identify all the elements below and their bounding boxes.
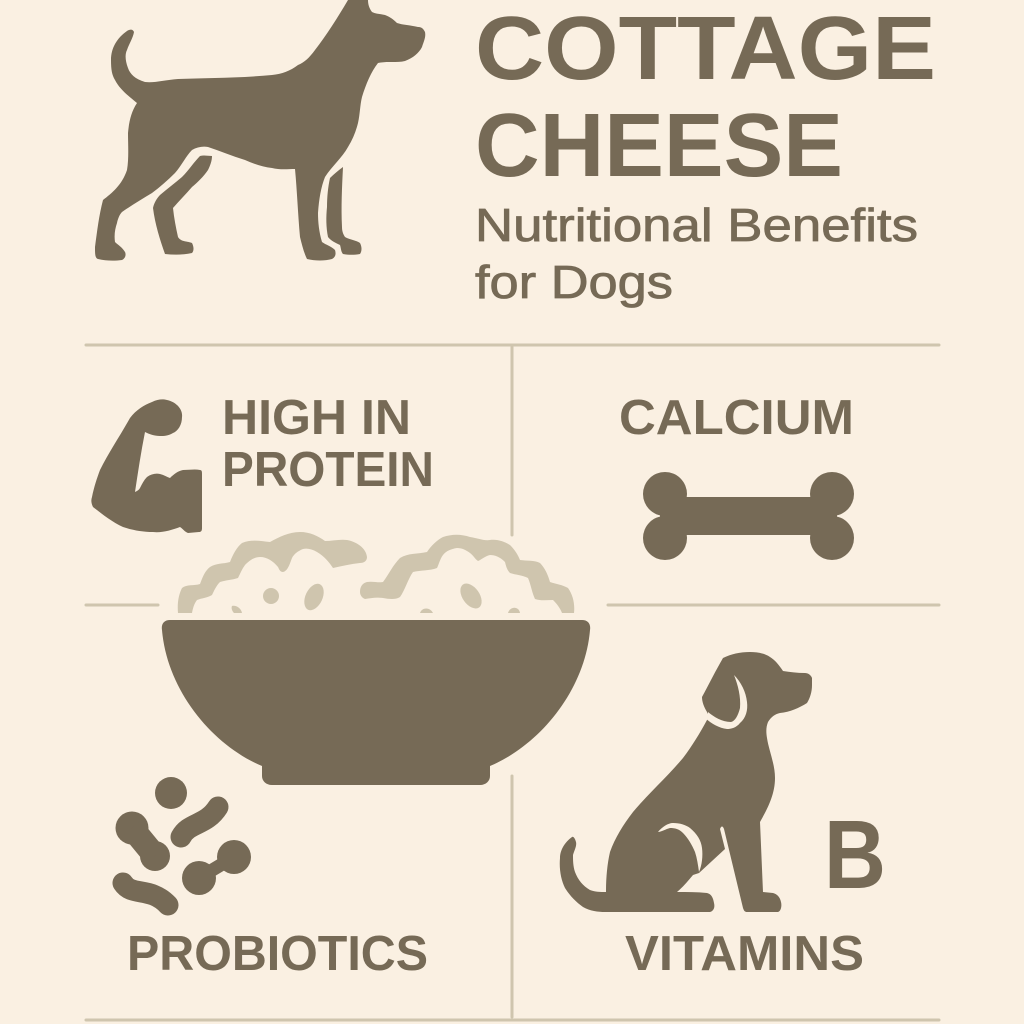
panel: probiotics	[116, 777, 428, 981]
bowl of cottage cheese	[162, 532, 590, 785]
cottage cheese curds	[178, 532, 574, 613]
panel: high in protein	[91, 391, 434, 533]
icon: probiotic bacteria	[116, 777, 251, 905]
label: probiotics: PROBIOTICS	[127, 927, 428, 981]
panel: B vitamins	[560, 652, 886, 981]
title	[475, 0, 936, 196]
bowl	[162, 620, 590, 785]
label: calcium: CALCIUM	[619, 391, 854, 445]
icon: sitting dog	[560, 652, 812, 912]
B letter: B	[824, 800, 886, 909]
label: high in protein: HIGH IN	[222, 391, 411, 445]
subtitle: for Dogs	[475, 256, 673, 308]
icon: standing dog	[95, 0, 425, 261]
icon: flexed arm	[91, 399, 202, 533]
title: COTTAGE	[475, 0, 936, 99]
label: high in protein	[222, 391, 434, 497]
label: vitamins: VITAMINS	[625, 927, 864, 981]
panel: calcium	[619, 391, 854, 560]
subtitle: Nutritional Benefits	[475, 199, 918, 251]
icon: bone	[643, 472, 854, 560]
subtitle	[475, 199, 918, 308]
title: CHEESE	[475, 96, 843, 196]
label: high in protein: PROTEIN	[222, 443, 434, 497]
